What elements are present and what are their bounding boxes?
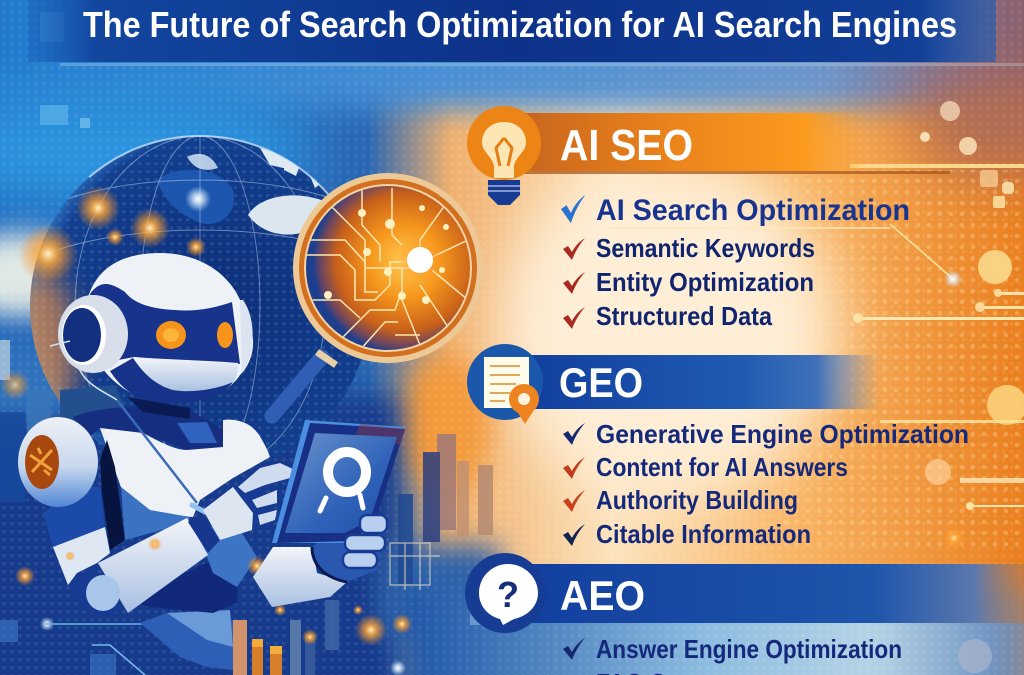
AI SEO banner xyxy=(525,113,865,171)
icon: question speech bubble xyxy=(465,553,545,633)
heading: GEO: GEO xyxy=(559,359,643,406)
core light xyxy=(407,247,433,273)
robot upper arm xyxy=(43,487,123,617)
list: AEO items xyxy=(563,634,902,675)
magnifying glass with circuit brain xyxy=(272,173,483,416)
visor xyxy=(90,284,240,364)
robot holding hand xyxy=(343,515,387,568)
circuit lines xyxy=(305,188,468,350)
robot pointing hand xyxy=(236,462,296,527)
panel: AEO xyxy=(465,553,1024,675)
shoulder badge xyxy=(25,435,59,489)
eyes xyxy=(156,321,186,349)
AEO banner xyxy=(525,564,1024,623)
title banner xyxy=(28,0,996,62)
robot shoulder xyxy=(18,417,98,507)
list: GEO items: Generative Engine Optimization xyxy=(596,419,969,449)
robot head xyxy=(50,253,253,419)
earphone xyxy=(58,295,128,373)
icon: lightbulb xyxy=(467,106,541,205)
list: AI SEO items: AI Search Optimization xyxy=(596,194,910,227)
robot lower body xyxy=(125,523,257,670)
GEO banner xyxy=(530,355,880,409)
city skyline left xyxy=(0,340,240,675)
search icon xyxy=(320,452,366,511)
panel: GEO xyxy=(467,344,969,549)
tablet xyxy=(272,420,405,543)
robot torso xyxy=(73,400,270,550)
list: AI SEO items xyxy=(561,194,910,331)
list: AI SEO items: Semantic Keywords xyxy=(596,233,815,263)
tablet hand lower arm xyxy=(253,520,385,607)
robot forearm xyxy=(65,462,296,613)
list: GEO items: Content for AI Answers xyxy=(596,452,848,482)
robot xyxy=(18,253,405,670)
decorative circuit lights on right xyxy=(610,101,1024,673)
handle xyxy=(272,357,322,416)
icon: question speech bubble: ? xyxy=(497,574,519,615)
globe xyxy=(19,135,362,450)
city skyline right with bars xyxy=(233,434,493,675)
heading: AI SEO: AI SEO xyxy=(560,121,693,170)
heading: AEO: AEO xyxy=(560,572,645,619)
icon: document with badge xyxy=(467,344,543,424)
list: GEO items xyxy=(563,419,969,549)
list: AI SEO items: Structured Data xyxy=(596,301,772,331)
list: AEO items: Answer Engine Optimization xyxy=(596,634,902,664)
list: GEO items: Citable Information xyxy=(596,519,811,549)
list: GEO items: Authority Building xyxy=(596,485,798,515)
list: AI SEO items: Entity Optimization xyxy=(596,267,814,297)
panel: AI SEO xyxy=(467,106,950,331)
